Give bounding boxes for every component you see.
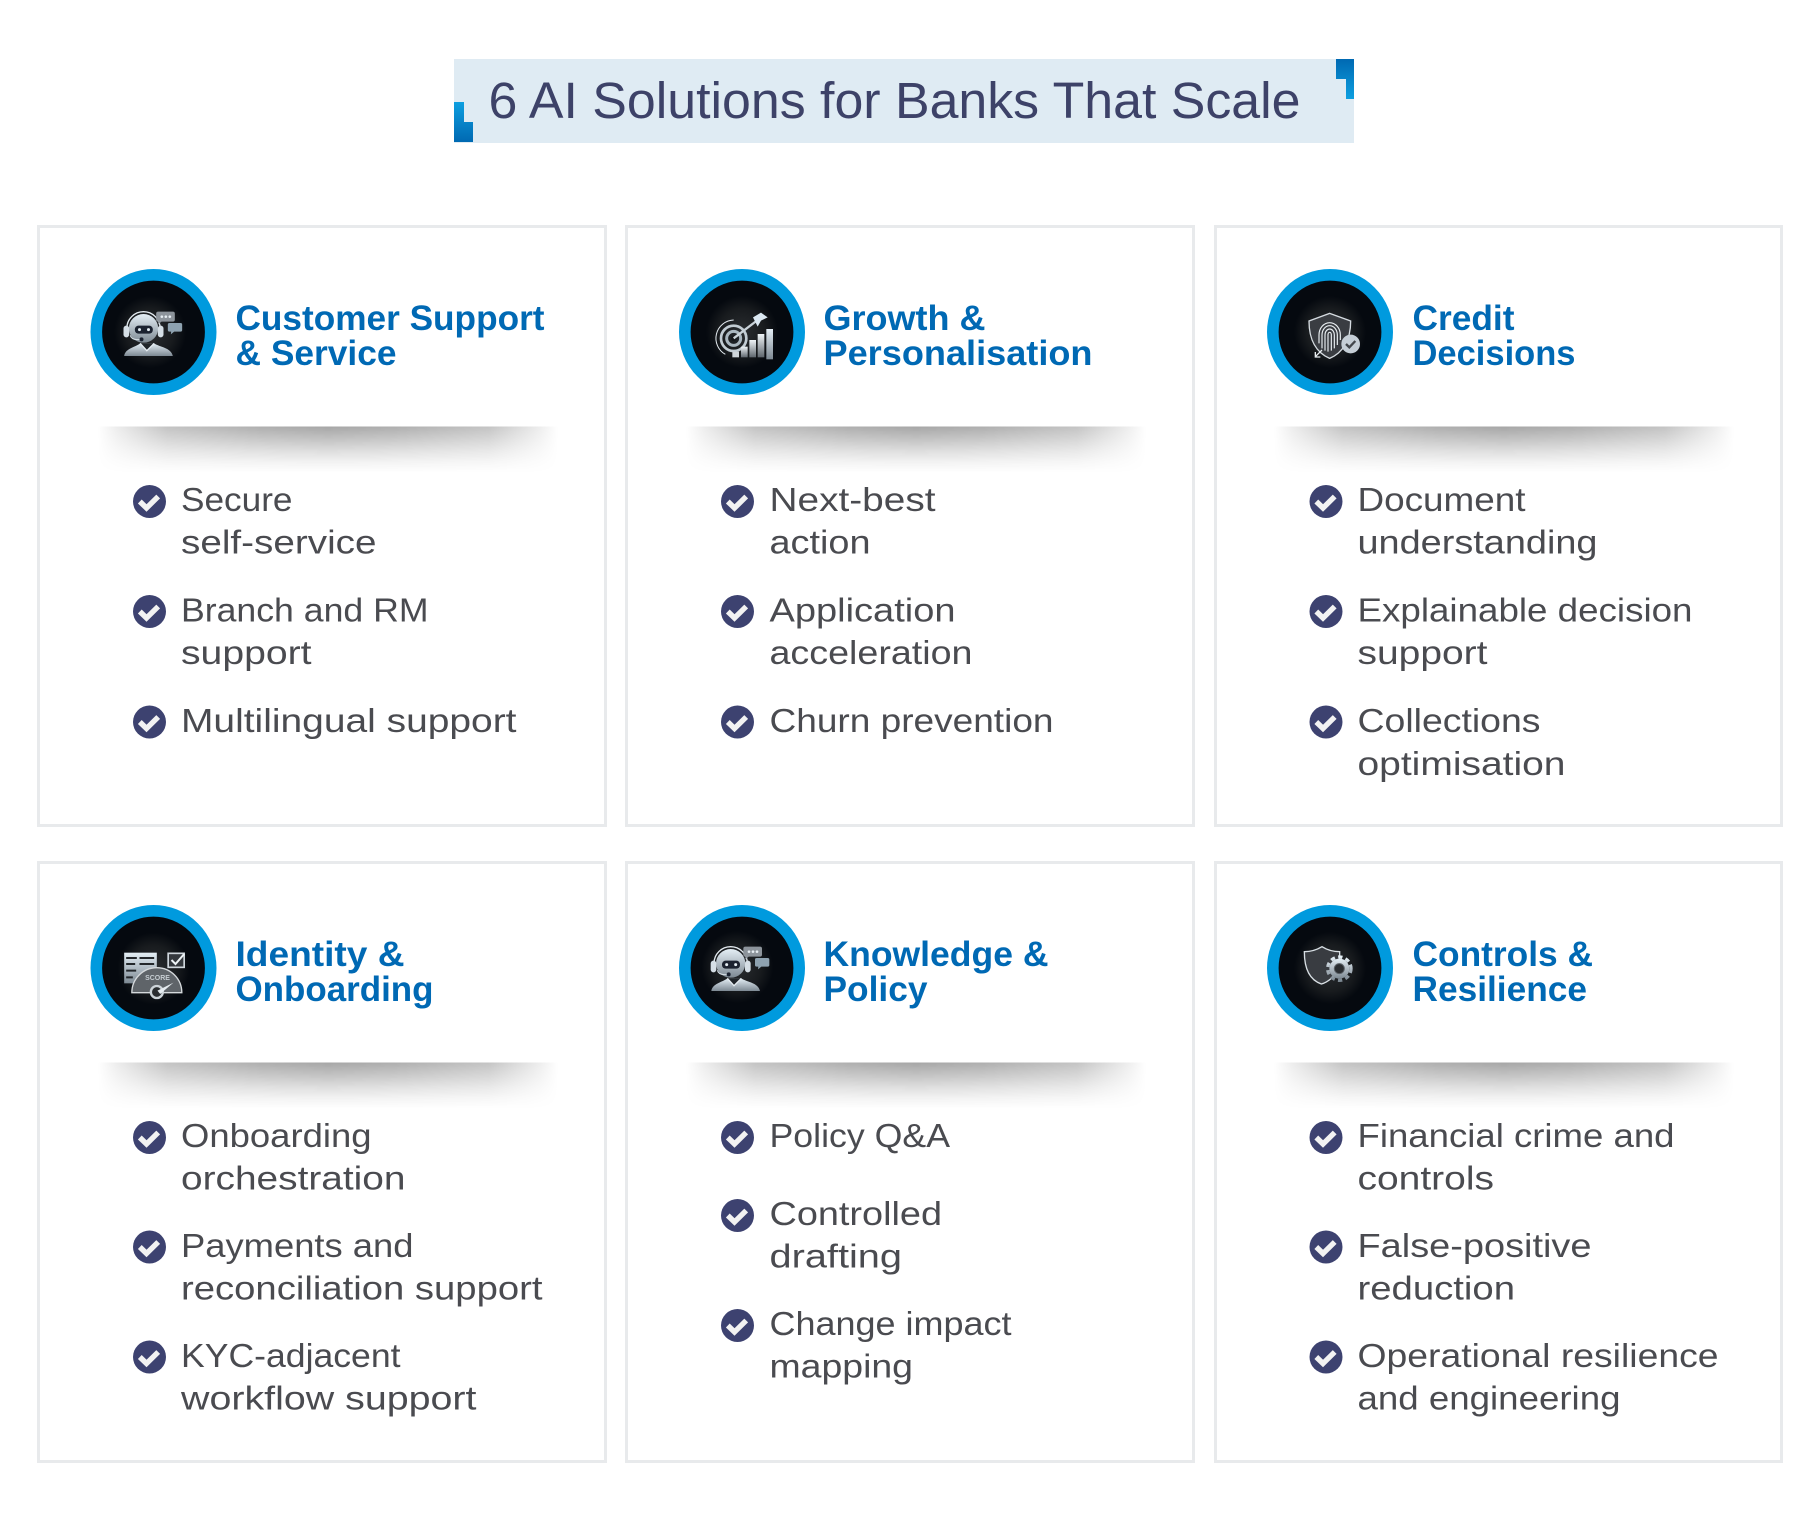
heading (236, 935, 434, 1009)
list item: acceleration (770, 634, 972, 671)
heading: & Service (236, 334, 396, 373)
list item (133, 1337, 476, 1416)
list item: Explainable decision (1358, 592, 1692, 628)
list item (1310, 1117, 1674, 1196)
list item: Policy Q&A (770, 1117, 950, 1154)
icon: document and score gauge (96, 911, 211, 1025)
list item: Onboarding (181, 1117, 372, 1154)
heading: Policy (824, 970, 928, 1009)
list item: Controlled (770, 1195, 942, 1232)
list item (721, 592, 972, 671)
list item: understanding (1358, 524, 1598, 560)
panel: Knowledge & Policy (626, 862, 1194, 1462)
icon: fingerprint shield (1273, 275, 1387, 389)
list item (1310, 592, 1692, 671)
divider shadow (1282, 426, 1725, 466)
heading: Growth & (824, 299, 986, 338)
divider shadow (106, 426, 549, 466)
list item: Financial crime and (1358, 1117, 1674, 1154)
list item (1310, 481, 1598, 560)
list item: Next-best (770, 481, 936, 518)
heading (824, 299, 1092, 373)
list item (1310, 702, 1566, 782)
list item: action (770, 524, 870, 560)
list item: Operational resilience (1358, 1337, 1718, 1374)
list item (721, 1195, 942, 1274)
heading (1412, 935, 1593, 1009)
list item (133, 1227, 542, 1306)
list item: Application (770, 592, 956, 628)
icon: robot support agent (96, 275, 211, 389)
list item: Secure (181, 481, 292, 518)
list item (1310, 1337, 1718, 1416)
title banner (454, 59, 1354, 143)
heading (1412, 299, 1576, 373)
heading: Personalisation (824, 334, 1092, 373)
corner accent: bottom left (454, 102, 473, 142)
list item: Churn prevention (770, 702, 1054, 739)
list item: reduction (1358, 1270, 1515, 1306)
title: 6 AI Solutions for Banks That Scale (488, 72, 1300, 129)
list item: Collections (1358, 702, 1540, 739)
icon: target and bar chart (685, 275, 799, 389)
list item (133, 1117, 406, 1196)
list item: Change impact (770, 1305, 1012, 1342)
list item: support (1358, 634, 1488, 671)
list item: and engineering (1358, 1380, 1620, 1416)
list item: mapping (770, 1348, 913, 1384)
panel: Customer Support & Service (38, 226, 606, 826)
divider shadow (106, 1062, 549, 1102)
list item (133, 481, 376, 560)
list item: optimisation (1358, 745, 1566, 782)
icon: document and score gauge: SCORE (145, 975, 170, 982)
list item: Payments and (181, 1227, 414, 1264)
list item (721, 481, 936, 560)
list item: self-service (181, 524, 376, 560)
list item: Document (1358, 481, 1526, 518)
list item: reconciliation support (181, 1270, 542, 1306)
panel: Growth & Personalisation (626, 226, 1194, 826)
heading: Resilience (1412, 970, 1587, 1009)
icon: shield and gear (1273, 911, 1387, 1025)
list item: orchestration (181, 1160, 406, 1196)
list item (1310, 1227, 1592, 1306)
panel: Controls & Resilience (1216, 862, 1782, 1462)
icon: robot assistant (685, 911, 799, 1025)
list item (133, 592, 428, 671)
list item: drafting (770, 1238, 902, 1274)
heading: Knowledge & (824, 935, 1048, 974)
heading (236, 299, 545, 373)
list item: controls (1358, 1160, 1494, 1196)
heading: Onboarding (236, 970, 434, 1009)
divider shadow (1282, 1062, 1725, 1102)
heading: Identity & (236, 935, 404, 974)
divider shadow (694, 426, 1137, 466)
heading: Customer Support (236, 299, 545, 338)
heading: Controls & (1412, 935, 1593, 974)
heading: Decisions (1412, 334, 1576, 373)
panel: Credit Decisions (1216, 226, 1782, 826)
list item: Branch and RM (181, 592, 428, 628)
divider shadow (694, 1062, 1137, 1102)
list item: KYC-adjacent (181, 1337, 400, 1374)
list item: support (181, 634, 312, 671)
list item: False-positive (1358, 1227, 1592, 1264)
list item: workflow support (180, 1380, 477, 1416)
heading (824, 935, 1048, 1009)
list item: Multilingual support (181, 702, 516, 739)
panel: Identity & Onboarding (38, 862, 606, 1462)
corner accent: top right (1336, 59, 1354, 99)
heading: Credit (1412, 299, 1515, 338)
list item (721, 1305, 1012, 1384)
